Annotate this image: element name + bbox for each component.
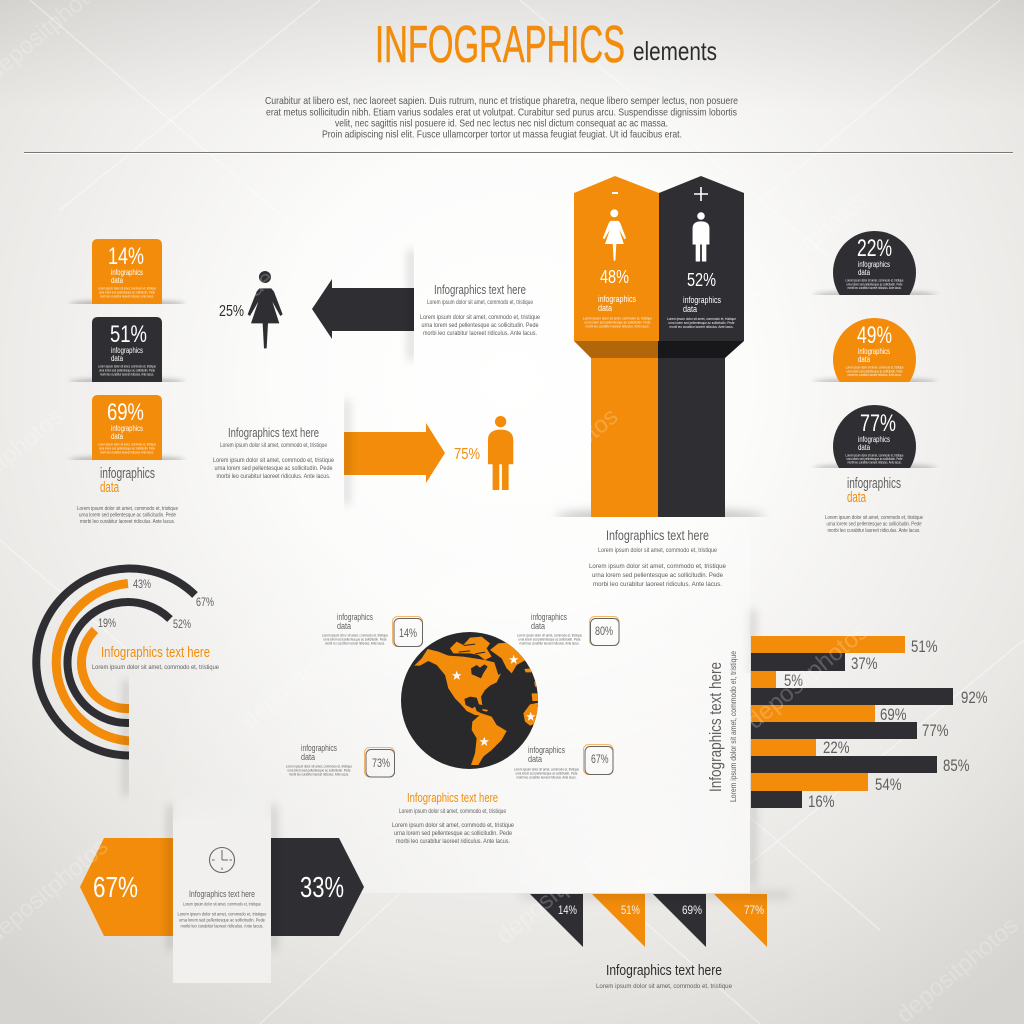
card: 14%: infographics bbox=[111, 268, 143, 277]
globe callout: 80% bbox=[517, 612, 619, 646]
bar chart: 54% bbox=[875, 775, 902, 794]
text block: bottom: Infographics text here bbox=[606, 962, 722, 979]
card: 51% bbox=[92, 317, 162, 382]
globe callout: 14%: 14% bbox=[399, 626, 417, 640]
bar chart: 85% bbox=[943, 756, 970, 775]
column: men 52%: data bbox=[683, 304, 697, 314]
text block: bottom bbox=[596, 962, 732, 990]
radial chart heading bbox=[92, 645, 219, 671]
globe callout: 73%: morbi leo curabitur laoreet ridiculus. Ante lacus. bbox=[289, 772, 349, 776]
panel: middle text panel shadow edge bbox=[200, 380, 349, 530]
text block: below columns: morbi leo curabitur laoreet ridiculus. Ante lacus. bbox=[593, 581, 722, 588]
text block: right infographics data: morbi leo curabitur laoreet ridiculus. Ante lacus. bbox=[828, 528, 920, 534]
text block: middle panel: Infographics text here bbox=[228, 425, 319, 440]
dome: 22%: 22% bbox=[857, 235, 892, 262]
globe callout: 67% bbox=[514, 744, 613, 780]
globe callout: 67%: infographics bbox=[528, 745, 565, 755]
dome: 77%: data bbox=[858, 443, 870, 452]
column: women 48% bbox=[574, 176, 659, 517]
text block: middle panel: urna lorem sed pellentesque ac sollicitudin. Pede bbox=[214, 465, 333, 472]
radial chart labels bbox=[98, 577, 214, 631]
text block: below columns: Lorem ipsum dolor sit amet, commodo et, tristique bbox=[598, 547, 717, 554]
text block: below columns bbox=[589, 527, 726, 588]
globe callout: 14%: infographics bbox=[337, 612, 373, 622]
bar chart: 51% bbox=[911, 637, 938, 656]
dome: 22%: urna lorem sed pellentesque ac sollicitudin. Pede bbox=[846, 282, 902, 286]
card: 51%: Lorem ipsum dolor sit amet, commodo et, tristique bbox=[98, 364, 156, 368]
text block: left infographics data: urna lorem sed pellentesque ac sollicitudin. Pede bbox=[79, 512, 176, 518]
text block: left infographics data: infographics bbox=[100, 466, 155, 482]
center strip panel: Lorem ipsum dolor sit amet, commodo et, tristique bbox=[178, 912, 267, 916]
globe callout: 80%: 80% bbox=[595, 624, 613, 638]
globe callout: 80%: morbi leo curabitur laoreet ridiculus. Ante lacus. bbox=[520, 642, 580, 646]
text block: under globe: Lorem ipsum dolor sit amet, commodo et, tristique bbox=[392, 822, 514, 829]
center strip panel: Infographics text here bbox=[189, 889, 255, 899]
text block: under globe: Infographics text here bbox=[407, 790, 498, 805]
text block: right infographics data bbox=[825, 476, 923, 534]
intro paragraph bbox=[265, 95, 738, 140]
text block: top panel: Lorem ipsum dolor sit amet, commodo et, tristique bbox=[420, 314, 540, 321]
card: 14%: data bbox=[111, 276, 123, 285]
globe callout: 14%: Lorem ipsum dolor sit amet, commodo et, tristique bbox=[322, 634, 388, 638]
text block: under globe: Lorem ipsum dolor sit amet, commodo et, tristique bbox=[399, 808, 506, 815]
text block: middle panel: Lorem ipsum dolor sit amet, commodo et, tristique bbox=[213, 457, 334, 464]
dome: 49%: Lorem ipsum dolor sit amet, commodo et, tristique bbox=[846, 366, 904, 370]
card: 51%: urna lorem sed pellentesque ac sollicitudin. Pede bbox=[99, 368, 155, 372]
dome shadows bbox=[813, 291, 937, 472]
watermark: depositphotos bbox=[742, 618, 873, 735]
globe callout: 67%: data bbox=[528, 754, 542, 764]
vertical heading for bar chart: Infographics text here bbox=[706, 662, 725, 792]
intro paragraph: velit, nec sagittis nisl posuere id. Sed nec lectus nec nisl dictum consequat ac ac massa. bbox=[335, 118, 668, 130]
center strip panel: morbi leo curabitur laoreet ridiculus. Ante lacus. bbox=[180, 924, 264, 928]
column: women 48%: urna lorem sed pellentesque ac sollicitudin. Pede bbox=[584, 320, 651, 324]
dome: 77% bbox=[833, 405, 916, 468]
globe callout: 67%: morbi leo curabitur laoreet ridiculus. Ante lacus. bbox=[516, 776, 576, 780]
radial chart labels: 43% bbox=[133, 577, 151, 591]
vertical heading for bar chart bbox=[706, 651, 738, 802]
icon: woman 25% bbox=[219, 271, 283, 348]
bar chart: 92% bbox=[961, 688, 988, 707]
bar chart bbox=[751, 636, 988, 811]
radial chart heading: Infographics text here bbox=[101, 645, 210, 661]
text block: below columns: Infographics text here bbox=[606, 527, 709, 543]
card: 14%: morbi leo curabitur laoreet ridiculus. Ante lacus. bbox=[100, 294, 154, 298]
text block: right infographics data: urna lorem sed pellentesque ac sollicitudin. Pede bbox=[826, 522, 922, 528]
icon: clock bbox=[210, 848, 234, 872]
globe callout: 73% bbox=[286, 743, 394, 777]
column: women 48%: morbi leo curabitur laoreet ridiculus. Ante lacus. bbox=[586, 324, 650, 328]
watermark: depositphotos bbox=[237, 618, 368, 735]
radial chart labels: 52% bbox=[173, 617, 191, 631]
big panel bbox=[124, 520, 790, 897]
dome: 49%: data bbox=[858, 355, 870, 364]
triangle flags: 14% bbox=[558, 905, 577, 917]
card: 69%: morbi leo curabitur laoreet ridiculus. Ante lacus. bbox=[100, 450, 154, 454]
watermark: depositphotos bbox=[492, 833, 623, 950]
card: 69% bbox=[92, 395, 162, 460]
text block: right infographics data: data bbox=[847, 490, 867, 506]
bar chart: 37% bbox=[851, 654, 878, 673]
text block: right infographics data: Lorem ipsum dolor sit amet, commodo et, tristique bbox=[825, 515, 923, 521]
text block: left infographics data: Lorem ipsum dolor sit amet, commodo et, tristique bbox=[77, 506, 178, 512]
globe callout: 80%: infographics bbox=[531, 612, 567, 622]
text block: below columns: urna lorem sed pellentesque ac sollicitudin. Pede bbox=[592, 572, 723, 579]
text block: left infographics data: data bbox=[100, 480, 120, 496]
globe callout: 80%: urna lorem sed pellentesque ac sollicitudin. Pede bbox=[518, 638, 580, 642]
dome: 49%: urna lorem sed pellentesque ac sollicitudin. Pede bbox=[846, 370, 902, 374]
icon: woman 25%: 25% bbox=[219, 303, 244, 320]
hexagon: 33%: 33% bbox=[300, 872, 344, 904]
globe callout: 67%: 67% bbox=[591, 752, 609, 766]
globe callout: 80%: data bbox=[531, 621, 545, 631]
globe bbox=[401, 632, 540, 769]
arrow: dark pointing left bbox=[312, 279, 414, 339]
card shadows bbox=[69, 300, 185, 464]
dome: 49%: infographics bbox=[858, 347, 890, 356]
globe callout: 73%: data bbox=[301, 752, 315, 762]
dome: 77%: infographics bbox=[858, 435, 890, 444]
text block: middle panel: Lorem ipsum dolor sit amet, commodo et, tristique bbox=[220, 442, 327, 449]
panel: top text panel shadow edge bbox=[409, 225, 549, 380]
dome: 77%: 77% bbox=[860, 410, 896, 437]
globe callout: 14%: urna lorem sed pellentesque ac sollicitudin. Pede bbox=[324, 638, 386, 642]
card: 51%: infographics bbox=[111, 346, 143, 355]
card: 14%: 14% bbox=[108, 243, 144, 270]
radial chart arcs bbox=[36, 569, 195, 756]
column: men 52%: morbi leo curabitur laoreet ridiculus. Ante lacus. bbox=[670, 324, 734, 329]
bar chart: 22% bbox=[823, 738, 850, 757]
text block: bottom: Lorem ipsum dolor sit amet, commodo et, tristique bbox=[596, 983, 732, 990]
card: 14% bbox=[92, 239, 162, 304]
globe callout: 67%: urna lorem sed pellentesque ac sollicitudin. Pede bbox=[516, 772, 578, 776]
bar chart: 5% bbox=[784, 671, 803, 690]
card: 51%: data bbox=[111, 354, 123, 363]
hexagon: 67%: 67% bbox=[93, 872, 138, 904]
dome: 22%: data bbox=[858, 268, 870, 277]
title: INFOGRAPHICS bbox=[375, 16, 625, 74]
dome: 22%: infographics bbox=[858, 260, 890, 269]
card: 14%: urna lorem sed pellentesque ac sollicitudin. Pede bbox=[99, 290, 155, 294]
bar chart: 77% bbox=[922, 721, 948, 740]
card: 69%: 69% bbox=[107, 399, 144, 426]
column shadow bbox=[555, 506, 765, 517]
intro paragraph: erat metus sollicitudin nibh. Etiam varius sodales erat ut volutpat. Curabitur sed purus arcu. Suspendisse dignissim lobortis bbox=[266, 106, 737, 118]
bar chart: 69% bbox=[880, 705, 906, 724]
card: 51%: morbi leo curabitur laoreet ridiculus. Ante lacus. bbox=[100, 372, 154, 376]
dome: 77%: Lorem ipsum dolor sit amet, commodo et, tristique bbox=[846, 454, 904, 458]
globe callout: 67%: Lorem ipsum dolor sit amet, commodo et, tristique bbox=[514, 768, 579, 772]
watermark: depositphotos bbox=[242, 186, 373, 303]
hexagon: 33% bbox=[271, 838, 364, 936]
globe callout: 73%: Lorem ipsum dolor sit amet, commodo et, tristique bbox=[286, 764, 352, 768]
globe callout: 73%: urna lorem sed pellentesque ac sollicitudin. Pede bbox=[288, 768, 350, 772]
card: 69%: data bbox=[111, 432, 123, 441]
text block: under globe: morbi leo curabitur laoreet ridiculus. Ante lacus. bbox=[396, 838, 510, 845]
watermark: depositphotos bbox=[742, 186, 873, 303]
radial chart heading: Lorem ipsum dolor sit amet, commodo et, tristique bbox=[92, 664, 219, 671]
icon: man 75%: 75% bbox=[454, 446, 480, 463]
icon: stars bbox=[452, 655, 535, 746]
globe callout: 73%: 73% bbox=[372, 756, 390, 770]
column: men 52%: Lorem ipsum dolor sit amet, commodo et, tristique bbox=[667, 316, 737, 321]
text block: under globe bbox=[392, 790, 514, 845]
dome: 49% bbox=[833, 318, 916, 382]
globe callout: 14% bbox=[322, 612, 422, 646]
text block: middle panel bbox=[213, 425, 334, 480]
column: women 48%: data bbox=[598, 303, 612, 313]
text block: middle panel: morbi leo curabitur laoreet ridiculus. Ante lacus. bbox=[216, 473, 331, 480]
globe callout: 80%: Lorem ipsum dolor sit amet, commodo et, tristique bbox=[517, 634, 582, 638]
dome: 77%: urna lorem sed pellentesque ac sollicitudin. Pede bbox=[846, 457, 902, 461]
text block: below columns: Lorem ipsum dolor sit amet, commodo et, tristique bbox=[589, 563, 726, 570]
radial chart labels: 19% bbox=[98, 616, 116, 630]
text block: right infographics data: infographics bbox=[847, 476, 901, 492]
triangle flags: 77% bbox=[744, 905, 764, 917]
column: men 52%: 52% bbox=[687, 270, 716, 290]
text block: top panel: Infographics text here bbox=[434, 282, 526, 297]
dome: 22%: Lorem ipsum dolor sit amet, commodo et, tristique bbox=[846, 278, 904, 282]
center strip panel bbox=[168, 785, 276, 983]
center strip panel: Lorem ipsum dolor sit amet, commodo et, tristique bbox=[183, 902, 261, 906]
triangle flags: 69% bbox=[682, 905, 702, 917]
triangle flags bbox=[530, 894, 767, 947]
intro paragraph: Curabitur at libero est, nec laoreet sapien. Duis rutrum, nunc et tristique pharetra, neque libero semper lectus, non posuere bbox=[265, 95, 738, 107]
globe callout: 14%: data bbox=[337, 621, 351, 631]
bar chart: 16% bbox=[808, 792, 834, 811]
globe callout: 73%: infographics bbox=[301, 743, 337, 753]
text block: top panel: urna lorem sed pellentesque ac sollicitudin. Pede bbox=[422, 322, 539, 329]
text block: under globe: urna lorem sed pellentesque ac sollicitudin. Pede bbox=[394, 830, 512, 837]
globe callout: 14%: morbi leo curabitur laoreet ridiculus. Ante lacus. bbox=[325, 642, 385, 646]
column: women 48%: 48% bbox=[600, 267, 629, 287]
text block: top panel: morbi leo curabitur laoreet ridiculus. Ante lacus. bbox=[423, 330, 537, 337]
radial chart labels: 67% bbox=[196, 595, 214, 609]
watermark: depositphotos bbox=[492, 403, 623, 520]
text block: top panel bbox=[420, 282, 540, 337]
column: men 52%: urna lorem sed pellentesque ac sollicitudin. Pede bbox=[668, 320, 735, 325]
title: elements bbox=[633, 36, 717, 66]
triangle flags: 51% bbox=[621, 905, 640, 917]
card: 69%: urna lorem sed pellentesque ac sollicitudin. Pede bbox=[99, 446, 155, 450]
text block: left infographics data: morbi leo curabitur laoreet ridiculus. Ante lacus. bbox=[80, 519, 175, 525]
card: 69%: infographics bbox=[111, 424, 143, 433]
card: 51%: 51% bbox=[110, 321, 147, 348]
dome: 49%: 49% bbox=[857, 322, 892, 349]
hexagon: 67% bbox=[80, 838, 173, 936]
dome: 77%: morbi leo curabitur laoreet ridiculus. Ante lacus. bbox=[848, 460, 902, 464]
card: 14%: Lorem ipsum dolor sit amet, commodo et, tristique bbox=[98, 286, 156, 290]
arrow: orange pointing right bbox=[344, 423, 445, 483]
vertical heading for bar chart: Lorem ipsum dolor sit amet, commodo et, tristique bbox=[729, 651, 738, 802]
dome: 49%: morbi leo curabitur laoreet ridiculus. Ante lacus. bbox=[848, 373, 902, 377]
center strip panel: urna lorem sed pellentesque ac sollicitudin. Pede bbox=[179, 918, 265, 922]
text block: top panel: Lorem ipsum dolor sit amet, commodo et, tristique bbox=[427, 299, 533, 306]
icon: man 75% bbox=[454, 416, 513, 490]
column: women 48%: infographics bbox=[598, 294, 636, 304]
dome: 22%: morbi leo curabitur laoreet ridiculus. Ante lacus. bbox=[848, 286, 902, 290]
card: 69%: Lorem ipsum dolor sit amet, commodo et, tristique bbox=[98, 442, 156, 446]
column: men 52%: infographics bbox=[683, 295, 721, 305]
column: women 48%: Lorem ipsum dolor sit amet, commodo et, tristique bbox=[583, 316, 653, 320]
dome: 22% bbox=[833, 231, 916, 295]
intro paragraph: Proin adipiscing nisl elit. Fusce ullamcorper tortor ut massa feugiat feugiat. Ut id faucibus erat. bbox=[322, 128, 682, 140]
text block: left infographics data bbox=[77, 466, 178, 525]
column: men 52% bbox=[658, 176, 744, 517]
